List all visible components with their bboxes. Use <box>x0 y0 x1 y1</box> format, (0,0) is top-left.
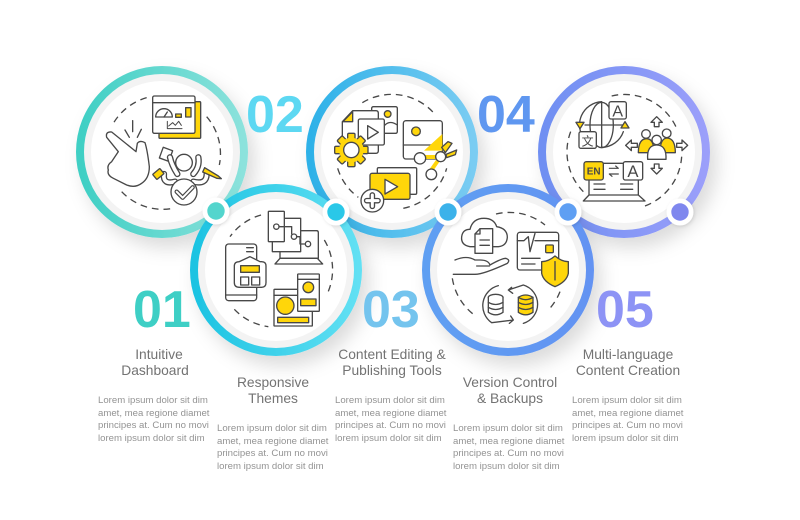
text block: step 3: lorem ipsum dolor sit dim <box>335 433 442 444</box>
node: connector 4 <box>554 198 582 226</box>
heading: Version Control & Backups: & Backups <box>477 391 543 406</box>
text block: step 4: amet, mea regione diamet <box>453 436 565 447</box>
text block: step 4: Lorem ipsum dolor sit dim <box>453 423 563 434</box>
number 01: 01 <box>133 281 191 339</box>
node: connector 3 <box>434 198 462 226</box>
icon: dashboard and hand <box>106 96 221 209</box>
icon: translation and people: 文 <box>582 134 594 149</box>
heading: Intuitive Dashboard: Dashboard <box>121 363 189 378</box>
heading: Content Editing & Publishing Tools: Publishing Tools <box>342 363 442 378</box>
text block: step 2: principes at. Cum no movi <box>217 448 328 459</box>
text block: step 5: principes at. Cum no movi <box>572 420 683 431</box>
text block: step 1: amet, mea regione diamet <box>98 408 210 419</box>
icon: translation and people: A <box>627 162 639 181</box>
panel: step 1 circle <box>80 70 244 234</box>
text block: step 5: lorem ipsum dolor sit dim <box>572 433 679 444</box>
text block: step 5: amet, mea regione diamet <box>572 408 684 419</box>
icon: translation and people: EN <box>587 166 601 177</box>
icon: responsive devices <box>226 211 333 327</box>
text block: step 2: lorem ipsum dolor sit dim <box>217 461 324 472</box>
text block: step 4: lorem ipsum dolor sit dim <box>453 461 560 472</box>
icon: translation and people: A <box>612 103 623 120</box>
icon: translation and people <box>567 94 688 206</box>
heading: Content Editing & Publishing Tools: Content Editing & <box>338 347 446 362</box>
text block: step 3: amet, mea regione diamet <box>335 408 447 419</box>
node: connector 5 <box>666 198 694 226</box>
icon: cloud backup and security <box>452 212 568 323</box>
number 05: 05 <box>596 281 654 339</box>
icon: media editing <box>335 94 457 212</box>
text block: step 2: Lorem ipsum dolor sit dim <box>217 423 327 434</box>
text block: step 1: lorem ipsum dolor sit dim <box>98 433 205 444</box>
text block: step 5: Lorem ipsum dolor sit dim <box>572 395 682 406</box>
heading: Intuitive Dashboard: Intuitive <box>135 347 183 362</box>
panel: step 2 circle <box>194 188 358 352</box>
text block: step 2: amet, mea regione diamet <box>217 436 329 447</box>
node: connector 2 <box>322 198 350 226</box>
text block: step 1: Lorem ipsum dolor sit dim <box>98 395 208 406</box>
text block: step 1: principes at. Cum no movi <box>98 420 209 431</box>
panel: step 5 circle <box>542 70 706 234</box>
number 02: 02 <box>246 86 304 144</box>
heading: Responsive Themes: Themes <box>248 391 298 406</box>
text block: step 4: principes at. Cum no movi <box>453 448 564 459</box>
panel: step 3 circle <box>310 70 474 234</box>
panel: step 4 circle <box>426 188 590 352</box>
heading: Multi-language Content Creation: Content Creation <box>576 363 680 378</box>
text block: step 3: principes at. Cum no movi <box>335 420 446 431</box>
heading: Responsive Themes: Responsive <box>237 375 309 390</box>
number 03: 03 <box>362 281 420 339</box>
heading: Multi-language Content Creation: Multi-language <box>583 347 674 362</box>
text block: step 3: Lorem ipsum dolor sit dim <box>335 395 445 406</box>
node: connector 1 <box>202 198 230 224</box>
heading: Version Control & Backups: Version Control <box>463 375 557 390</box>
number 04: 04 <box>477 86 535 144</box>
